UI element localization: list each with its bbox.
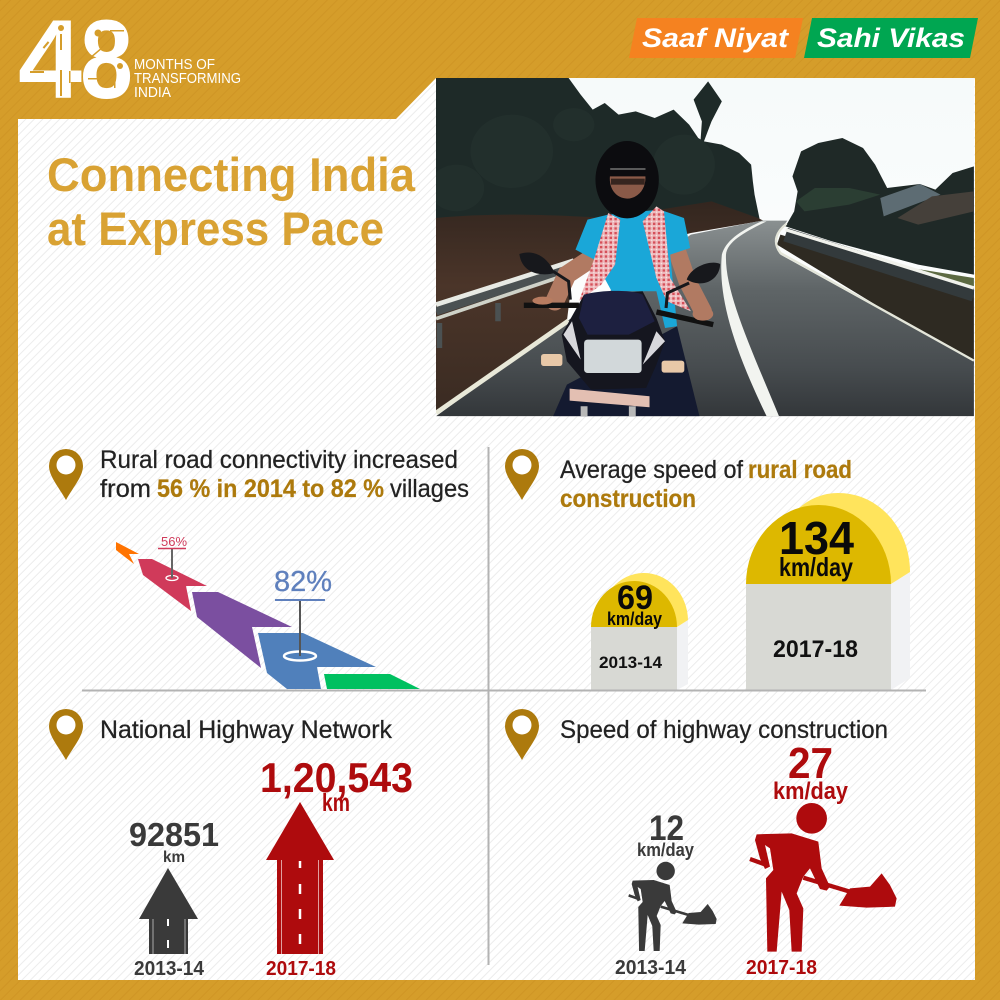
icon: location pin	[49, 449, 83, 500]
value: 92851 km: km	[163, 849, 185, 866]
heading: construction	[560, 485, 696, 513]
panel: average speed of rural road construction	[505, 449, 910, 690]
logo numerals: 4	[18, 0, 82, 122]
rider helmet and face	[595, 141, 659, 218]
heading: rural road	[748, 456, 852, 484]
badge: Saaf Niyat: Saaf Niyat	[642, 23, 789, 53]
hillside soil	[436, 201, 763, 413]
number plate	[570, 389, 650, 407]
arrow: 2017-18 road	[266, 802, 334, 954]
value: 12 km/day	[615, 809, 694, 979]
milestone: 2017-18: 134	[779, 512, 854, 564]
heading: Average speed of	[560, 456, 743, 484]
value: 1,20,543 km: km	[322, 789, 350, 817]
heading: Rural road connectivity increased	[100, 446, 458, 474]
title: at Express Pace	[47, 202, 384, 255]
headlight	[584, 340, 642, 373]
heading: National Highway Network	[100, 716, 392, 744]
road white lines	[721, 221, 779, 416]
arrow: 2013-14 road	[139, 868, 198, 954]
value: 92851 km: 2013-14	[134, 958, 205, 980]
icon: location pin	[505, 709, 539, 760]
heading	[560, 456, 852, 513]
value: 92851 km	[129, 816, 219, 980]
value: 12 km/day: km/day	[637, 840, 694, 860]
value: 92851 km: 92851	[129, 816, 219, 853]
chevron: blue	[258, 633, 376, 689]
icon: worker 2017-18	[750, 803, 897, 952]
rider t-shirt	[575, 210, 690, 328]
logo caption: INDIA	[134, 85, 171, 101]
rider legs	[553, 326, 699, 416]
panel: rural road connectivity	[49, 446, 469, 689]
rider scarf	[579, 213, 620, 301]
heading: villages	[390, 475, 469, 503]
value: 12 km/day: 12	[649, 809, 684, 848]
icon: location pin	[49, 709, 83, 760]
icon: worker 2013-14	[629, 862, 717, 951]
logo numerals: 8	[80, 0, 133, 122]
heading: 56 % in 2014 to 82 %	[157, 475, 384, 503]
value: 1,20,543 km: 2017-18	[266, 958, 336, 980]
logo caption	[134, 57, 241, 101]
road chevron chart	[116, 534, 420, 689]
logo numerals	[18, 0, 133, 122]
rider arms	[555, 256, 594, 301]
logo: 48 months of transforming India	[18, 0, 241, 122]
road surface	[436, 221, 974, 416]
value: 27 km/day: km/day	[773, 778, 849, 805]
badge: Sahi Vikas: Sahi Vikas	[817, 23, 965, 53]
heading: from	[100, 475, 151, 503]
chevron: orange	[116, 542, 139, 564]
photo: rider on a motorcycle on a winding road	[429, 78, 974, 416]
value: 1,20,543 km: 1,20,543	[260, 754, 413, 801]
value: 27 km/day: 2017-18	[746, 957, 817, 979]
badge: Sahi Vikas	[804, 18, 978, 58]
milestone: 2017-18: km/day	[779, 552, 853, 582]
marker: 82%: 82%	[274, 566, 332, 598]
value: 27 km/day	[746, 739, 849, 979]
badge: Saaf Niyat	[629, 18, 803, 58]
mirrors	[519, 253, 555, 274]
milestone: 2013-14: km/day	[607, 609, 662, 629]
handlebars and hands	[524, 305, 713, 325]
value: 1,20,543 km	[260, 754, 413, 980]
chevron: purple	[192, 592, 292, 668]
panel: national highway network	[49, 709, 413, 980]
milestone: 2017-18	[746, 493, 910, 690]
icon: location pin	[505, 449, 539, 500]
marker: 82%	[274, 566, 332, 660]
logo caption: MONTHS OF	[134, 57, 215, 73]
grass and verge on the right	[777, 235, 974, 365]
milestone: 2017-18: 2017-18	[773, 636, 858, 663]
heading: Speed of highway construction	[560, 716, 888, 744]
marker: 56%: 56%	[161, 534, 187, 549]
title	[47, 148, 416, 255]
guard rails	[436, 268, 570, 311]
value: 27 km/day: 27	[788, 739, 833, 788]
logo caption: TRANSFORMING	[134, 71, 241, 87]
trees and houses on the right	[786, 138, 974, 275]
chevron: green	[324, 674, 420, 689]
title: Connecting India	[47, 148, 416, 201]
value: 12 km/day: 2013-14	[615, 957, 687, 979]
chevron: red	[138, 559, 207, 611]
milestone: 2013-14: 2013-14	[599, 653, 663, 672]
marker: 56%	[158, 534, 187, 580]
motorcycle body	[562, 291, 665, 390]
panel: speed of highway construction	[505, 709, 897, 979]
milestone: 2013-14: 69	[617, 579, 653, 617]
indicators	[541, 354, 562, 366]
forest lighter foliage	[698, 138, 701, 142]
heading	[100, 446, 469, 503]
forest on the left	[436, 78, 760, 228]
milestone: 2013-14	[591, 573, 688, 690]
